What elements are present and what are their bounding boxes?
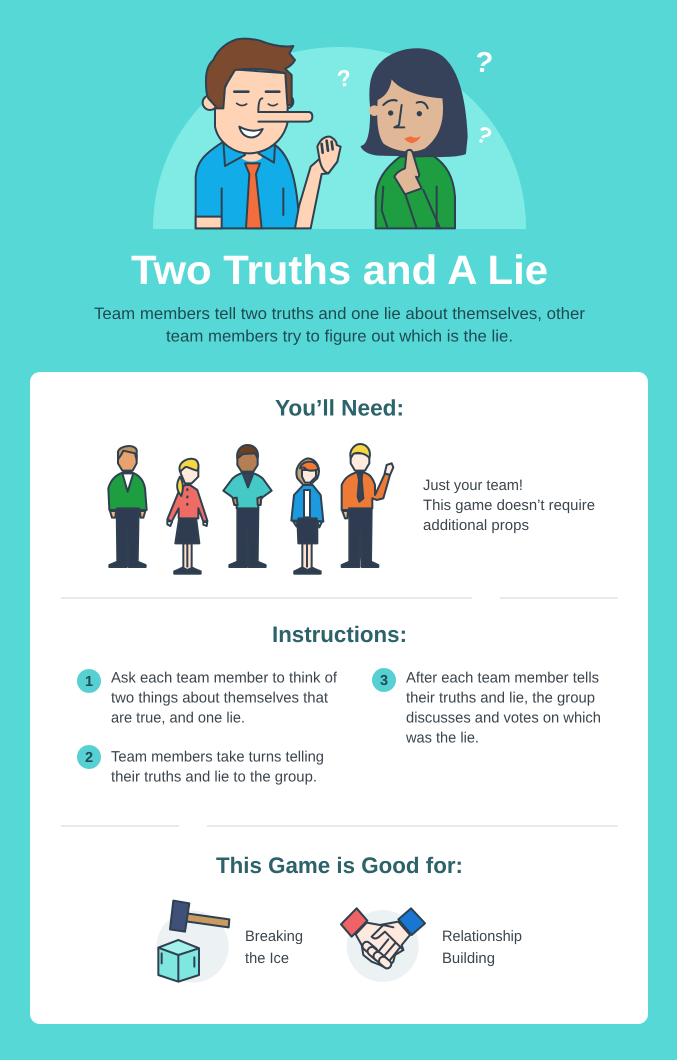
need description: Just your team! — [423, 477, 523, 494]
icon: handshake — [341, 908, 425, 982]
icon: hammer and ice — [157, 901, 229, 983]
need description: This game doesn’t require — [423, 497, 595, 514]
step 1: Ask each team member to think of — [111, 670, 338, 687]
step 1 — [77, 669, 338, 727]
step 2: Team members take turns telling — [111, 749, 324, 766]
step 3 — [372, 668, 601, 747]
white content panel — [30, 372, 648, 1024]
step 2: their truths and lie to the group. — [111, 769, 317, 786]
step 1: two things about themselves that — [111, 690, 329, 707]
intro text: team members try to figure out which is the lie. — [166, 328, 513, 346]
woman thinking — [362, 49, 467, 228]
intro text — [94, 305, 586, 346]
step 3: 3 — [380, 673, 388, 689]
person 2: red blouse — [167, 459, 207, 574]
step 2 — [77, 745, 324, 786]
step 3: was the lie. — [405, 730, 479, 747]
step 1: 1 — [85, 674, 93, 690]
person 4: blue jacket — [291, 458, 323, 574]
need description — [423, 477, 595, 534]
heading: instructions: Instructions: — [272, 622, 407, 647]
step 3: After each team member tells — [406, 670, 599, 687]
step 2: 2 — [85, 750, 93, 766]
intro text: Team members tell two truths and one lie about themselves, other — [94, 305, 586, 323]
label: relationship building: Building — [442, 950, 495, 967]
hero background semicircle — [153, 47, 526, 229]
question marks — [335, 46, 496, 150]
heading: you'll need: You’ll Need: — [275, 396, 404, 420]
step 3: their truths and lie, the group — [406, 690, 595, 707]
title: Two Truths and A Lie — [131, 247, 548, 293]
person 3: teal jacket — [223, 445, 272, 567]
team illustration — [108, 444, 393, 574]
label: relationship building: Relationship — [442, 928, 522, 945]
question marks: ? — [472, 120, 496, 150]
label: breaking the ice — [245, 928, 303, 967]
label: breaking the ice: Breaking — [245, 928, 303, 945]
step 1: are true, and one lie. — [111, 710, 245, 727]
need description: additional props — [423, 517, 529, 534]
hero illustration — [153, 39, 526, 229]
person 1: green cardigan — [108, 446, 147, 567]
person 5: orange shirt waving — [342, 444, 393, 567]
label: breaking the ice: the Ice — [245, 950, 289, 967]
man with long nose — [196, 39, 341, 228]
question marks: ? — [335, 64, 353, 92]
question marks: ? — [473, 46, 495, 80]
heading: good for: This Game is Good for: — [216, 853, 463, 878]
label: relationship building — [442, 928, 522, 967]
step 3: discusses and votes on which — [406, 710, 601, 727]
